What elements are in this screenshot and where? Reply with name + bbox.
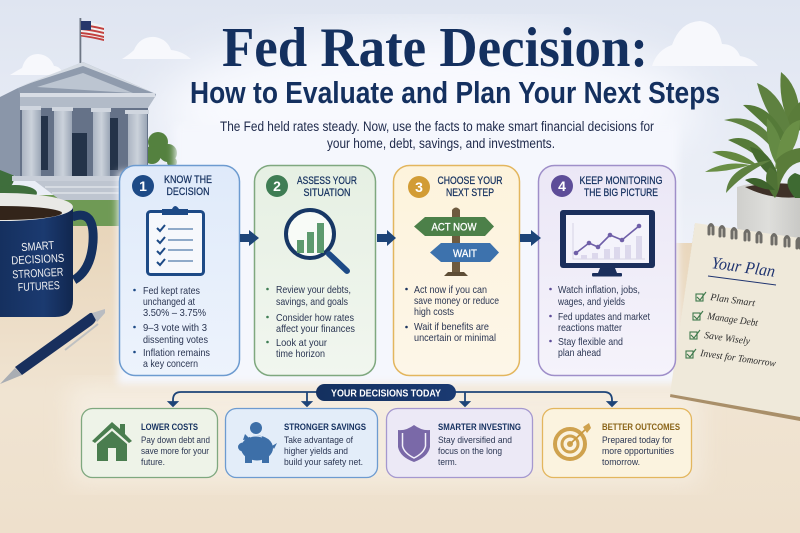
notepad spirals <box>709 224 800 248</box>
step 3 bullets <box>405 284 499 344</box>
step number 2 <box>266 175 288 197</box>
mug text: FUTURES <box>18 280 60 294</box>
icon: house <box>92 422 132 461</box>
stronger savings text: higher yields and <box>284 446 348 457</box>
intro text: your home, debt, savings, and investments. <box>327 136 555 151</box>
illustration: pen <box>0 309 105 384</box>
step 3 bullets: save money or reduce <box>414 295 499 307</box>
icon: clipboard checklist <box>148 206 204 274</box>
better outcomes text: tomorrow. <box>602 457 640 468</box>
subtitle: How to Evaluate and Plan Your Next Steps <box>190 75 720 110</box>
lower costs text: Pay down debt and <box>141 435 210 446</box>
panel: step 4 keep monitoring <box>538 166 676 376</box>
panel: lower costs <box>82 408 218 478</box>
step number 3 <box>408 176 430 198</box>
stronger savings text: STRONGER SAVINGS <box>284 421 366 432</box>
panel: smarter investing <box>386 408 532 478</box>
connector arrows to outcomes <box>169 392 616 406</box>
step 3 bullets: Wait if benefits are <box>414 321 489 333</box>
lower costs text: future. <box>141 457 165 468</box>
better outcomes text: BETTER OUTCOMES <box>602 421 680 432</box>
stronger savings text: build your safety net. <box>284 457 363 468</box>
soft backdrop behind the steps <box>118 125 678 384</box>
notepad checklist: Save Wisely <box>704 330 751 347</box>
stronger savings text <box>284 421 366 468</box>
step number 3: 3 <box>415 179 423 195</box>
step 1 bullets: dissenting votes <box>143 334 208 346</box>
illustration: potted plant <box>705 72 800 245</box>
step 1 bullets <box>133 285 210 370</box>
step 4 bullets: Fed updates and market <box>558 311 650 323</box>
notepad checklist: Manage Debt <box>706 311 759 329</box>
panel: step 1 know the decision <box>120 166 240 376</box>
step 4 bullets: reactions matter <box>558 322 622 334</box>
illustration: federal reserve building with flag <box>0 18 156 200</box>
step number 1: 1 <box>139 178 147 194</box>
step 4 bullets: Stay flexible and <box>558 336 623 348</box>
step 1 bullets: a key concern <box>143 358 198 370</box>
mug text: DECISIONS <box>11 253 65 267</box>
step 2 heading: ASSESS YOUR <box>297 175 357 187</box>
step number 4 <box>551 175 573 197</box>
illustration: coffee mug <box>0 193 93 317</box>
step 4 heading <box>580 175 662 199</box>
lower costs text: save more for your <box>141 446 210 457</box>
step 2 bullets: affect your finances <box>276 323 355 335</box>
panel: better outcomes <box>542 408 692 478</box>
notepad heading: Your Plan <box>710 253 776 281</box>
step 3 heading: CHOOSE YOUR <box>438 175 503 187</box>
lower costs text <box>141 421 210 468</box>
step 3 bullets: uncertain or minimal <box>414 332 496 344</box>
step 1 bullets: Fed kept rates <box>143 285 200 297</box>
step 1 heading: DECISION <box>166 186 210 198</box>
notepad checklist: Invest for Tomorrow <box>699 348 777 370</box>
smarter investing text: focus on the long <box>438 446 502 457</box>
panel: stronger savings <box>226 408 378 478</box>
step 3 bullets: high costs <box>414 306 454 318</box>
illustration: notepad <box>670 223 800 421</box>
step 1 heading <box>164 174 212 198</box>
banner: your decisions today <box>316 384 456 401</box>
mug text: STRONGER <box>12 267 64 281</box>
better outcomes text <box>602 421 680 468</box>
step 2 bullets: Consider how rates <box>276 312 354 324</box>
step number 2: 2 <box>273 178 281 194</box>
step 4 heading: KEEP MONITORING <box>580 175 662 187</box>
step 2 bullets: time horizon <box>276 348 325 360</box>
smarter investing text: SMARTER INVESTING <box>438 421 521 432</box>
step 2 bullets: savings, and goals <box>276 296 348 308</box>
icon: american flag <box>81 21 104 41</box>
better outcomes text: more opportunities <box>602 446 674 457</box>
step 4 bullets: Watch inflation, jobs, <box>558 284 640 296</box>
intro text: The Fed held rates steady. Now, use the facts to make smart financial decisions for <box>220 119 654 134</box>
banner: your decisions today: YOUR DECISIONS TODAY <box>331 388 441 400</box>
icon: magnifying glass with bars <box>286 210 347 271</box>
arrow: step 2 to 3 <box>377 230 396 246</box>
mug text: SMART <box>21 240 55 254</box>
notepad checklist: Plan Smart <box>709 292 756 309</box>
step 1 heading: KNOW THE <box>164 174 212 186</box>
notepad checklist <box>686 292 777 370</box>
plant leaves <box>705 72 800 198</box>
step 1 bullets: 9–3 vote with 3 <box>143 322 207 334</box>
lower costs text: LOWER COSTS <box>141 421 198 432</box>
icon: signpost: ACT NOW <box>432 222 477 234</box>
icon: shield <box>398 425 430 462</box>
step 3 heading: NEXT STEP <box>446 187 494 199</box>
step 4 bullets <box>549 284 650 359</box>
step 1 bullets: 3.50% – 3.75% <box>143 307 206 319</box>
icon: target with arrow <box>555 423 591 459</box>
step 4 bullets: wages, and yields <box>557 296 625 308</box>
step 3 bullets: Act now if you can <box>414 284 487 296</box>
step 1 bullets: unchanged at <box>143 296 195 308</box>
icon: piggy bank with coin <box>238 422 277 463</box>
icon: signpost <box>414 208 499 276</box>
step 4 bullets: plan ahead <box>558 347 601 359</box>
icon: monitor with line chart <box>560 210 655 276</box>
arrow: step 3 to 4 <box>520 230 541 246</box>
icon: signpost: WAIT <box>453 248 477 260</box>
clouds <box>10 21 758 75</box>
intro text <box>220 119 654 151</box>
step 2 bullets: Review your debts, <box>276 284 351 296</box>
step 2 bullets: Look at your <box>276 337 327 349</box>
panel: step 3 choose your next step <box>394 166 520 376</box>
step 1 bullets: Inflation remains <box>143 347 210 359</box>
smarter investing text: term. <box>438 457 457 468</box>
step 2 heading: SITUATION <box>304 187 351 199</box>
step number 4: 4 <box>558 178 566 194</box>
better outcomes text: Prepared today for <box>602 435 673 446</box>
step 2 heading <box>297 175 357 199</box>
step number 1 <box>132 175 154 197</box>
panel: step 2 assess your situation <box>254 166 376 376</box>
smarter investing text <box>438 421 521 468</box>
smarter investing text: Stay diversified and <box>438 435 512 446</box>
step 4 heading: THE BIG PICTURE <box>584 187 658 199</box>
stronger savings text: Take advantage of <box>284 435 353 446</box>
mug text <box>11 240 65 294</box>
arrow: step 1 to 2 <box>240 230 259 246</box>
step 2 bullets <box>266 284 355 360</box>
step 3 heading <box>438 175 503 199</box>
title: Fed Rate Decision: <box>222 17 648 79</box>
trees <box>0 132 177 201</box>
